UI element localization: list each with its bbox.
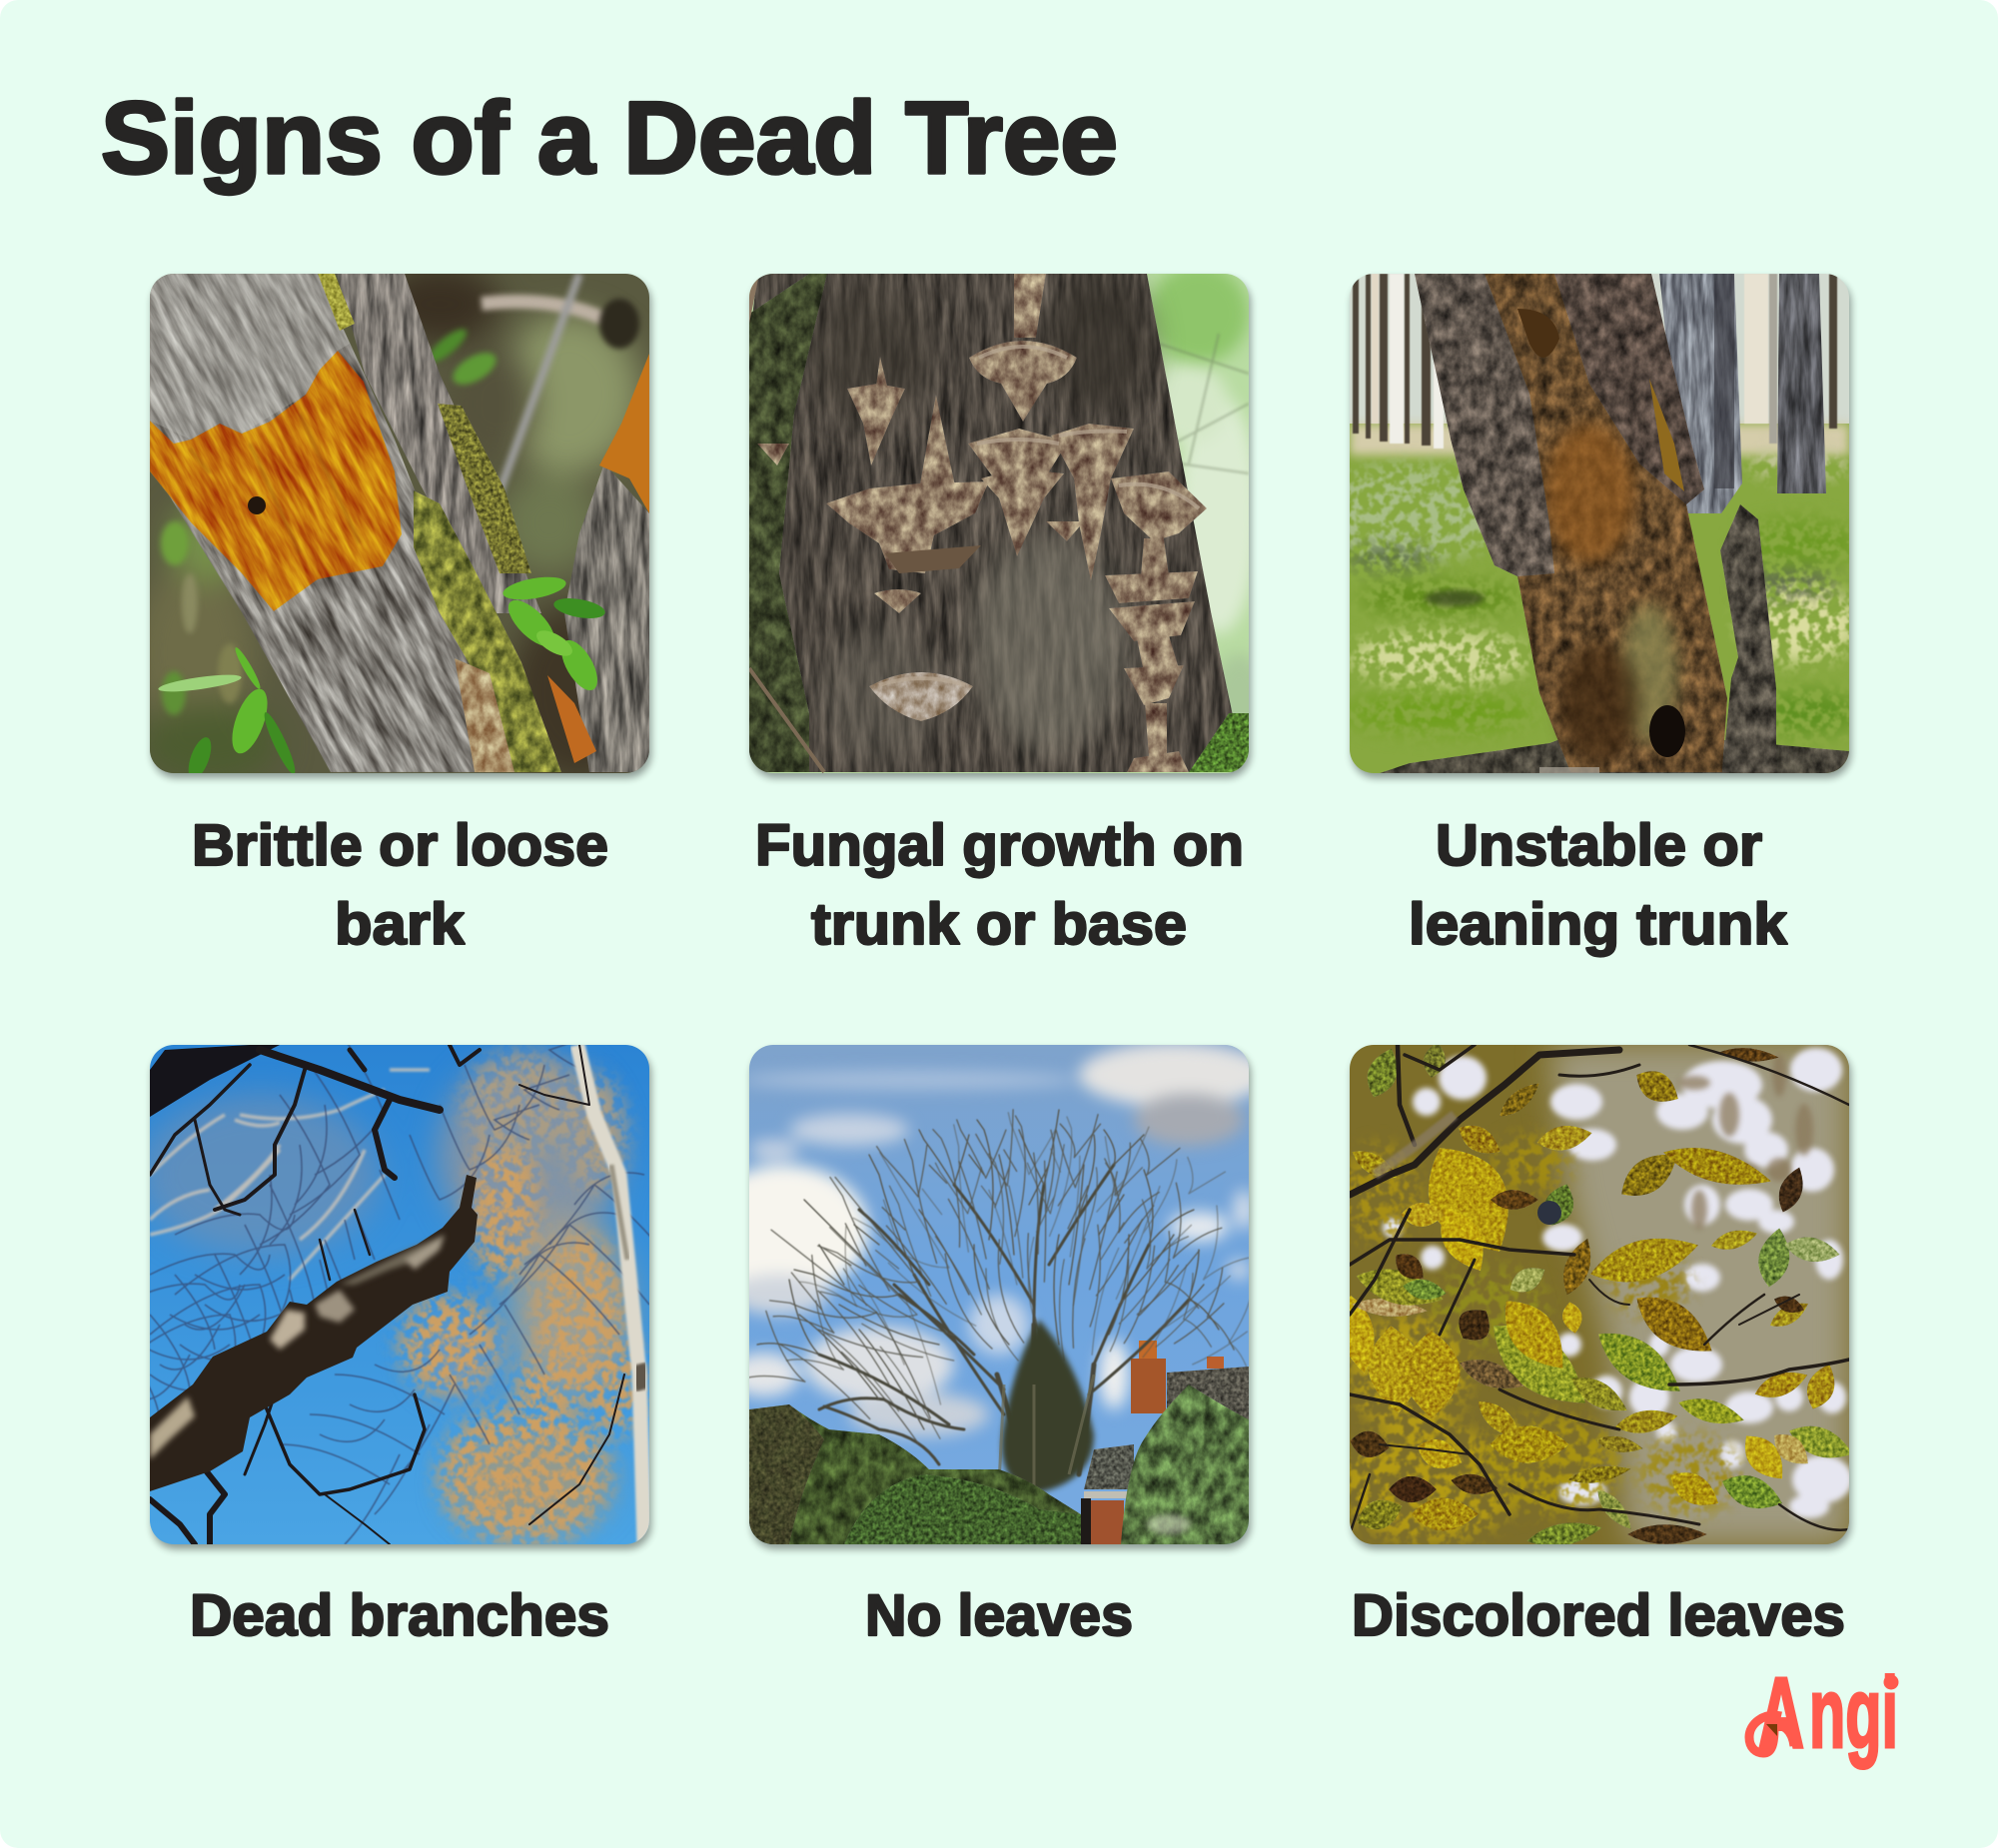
label: trunk or base xyxy=(811,892,1187,957)
moss on main trunk xyxy=(414,490,561,772)
rear trunk xyxy=(337,274,541,613)
panel: fungal growth xyxy=(749,264,1269,957)
house front xyxy=(1084,1444,1134,1489)
logo: Angi: ngi xyxy=(1809,1657,1898,1769)
dead branch xyxy=(150,1175,478,1491)
label: No leaves xyxy=(865,1583,1133,1648)
leaves xyxy=(1335,1040,1858,1551)
exposed orange wood xyxy=(150,351,402,611)
panel: brittle or loose bark xyxy=(147,274,656,946)
panel: dead branches xyxy=(120,1025,674,1648)
fine blue-dark twigs xyxy=(120,1025,674,1544)
logo: Angi xyxy=(1749,1657,1898,1769)
label: Discolored leaves xyxy=(1352,1583,1845,1648)
panel: unstable trunk xyxy=(1315,274,1859,957)
bare tree xyxy=(713,1054,1304,1484)
trunk xyxy=(749,274,1245,772)
bushes xyxy=(749,1404,1084,1544)
fungi xyxy=(757,274,1207,772)
white sky patches xyxy=(1383,1048,1852,1518)
photo: bracket fungi on dark trunk xyxy=(749,264,1269,778)
blurred brown shapes in background xyxy=(1678,1053,1813,1230)
forest trunks xyxy=(1353,274,1837,449)
photo: dead branch against blue sky xyxy=(120,1025,674,1549)
panel: discolored leaves xyxy=(1335,1040,1858,1648)
photo: yellow-brown leaves on branches xyxy=(1335,1040,1858,1551)
main trunk xyxy=(150,274,497,773)
panel: no leaves xyxy=(699,1043,1304,1648)
ground mottling xyxy=(1315,449,1859,688)
label: bark xyxy=(335,892,466,957)
mottled leaf mass on the left xyxy=(1340,1135,1739,1544)
right bush xyxy=(1121,1385,1249,1544)
dark branches xyxy=(150,1045,280,1117)
cypress xyxy=(1002,1320,1094,1494)
photo: leaning rotten trunk in a forest xyxy=(1315,274,1859,778)
right trunk xyxy=(564,463,649,772)
photo: bare tree, sky and house xyxy=(699,1043,1304,1549)
title: Signs of a Dead Tree xyxy=(101,81,1118,195)
moss xyxy=(749,274,827,772)
label xyxy=(192,813,608,957)
label xyxy=(755,813,1244,957)
roof and chimneys xyxy=(1167,1367,1249,1449)
label xyxy=(1409,813,1788,957)
birch xyxy=(577,1045,644,1544)
label: Dead branches xyxy=(190,1583,609,1648)
label: Brittle or loose xyxy=(192,813,608,878)
branches xyxy=(1350,1045,1849,1534)
label: leaning trunk xyxy=(1409,892,1788,957)
tan twigs xyxy=(150,1070,430,1280)
logo: Angi: A xyxy=(1758,1657,1804,1769)
label: Unstable or xyxy=(1436,813,1762,878)
bright leaves xyxy=(158,573,606,782)
label: Fungal growth on xyxy=(755,813,1244,878)
distant orange foliage xyxy=(400,1055,644,1544)
photo: tree with peeling bark exposing orange wood xyxy=(147,274,656,783)
main trunk xyxy=(1415,274,1727,772)
